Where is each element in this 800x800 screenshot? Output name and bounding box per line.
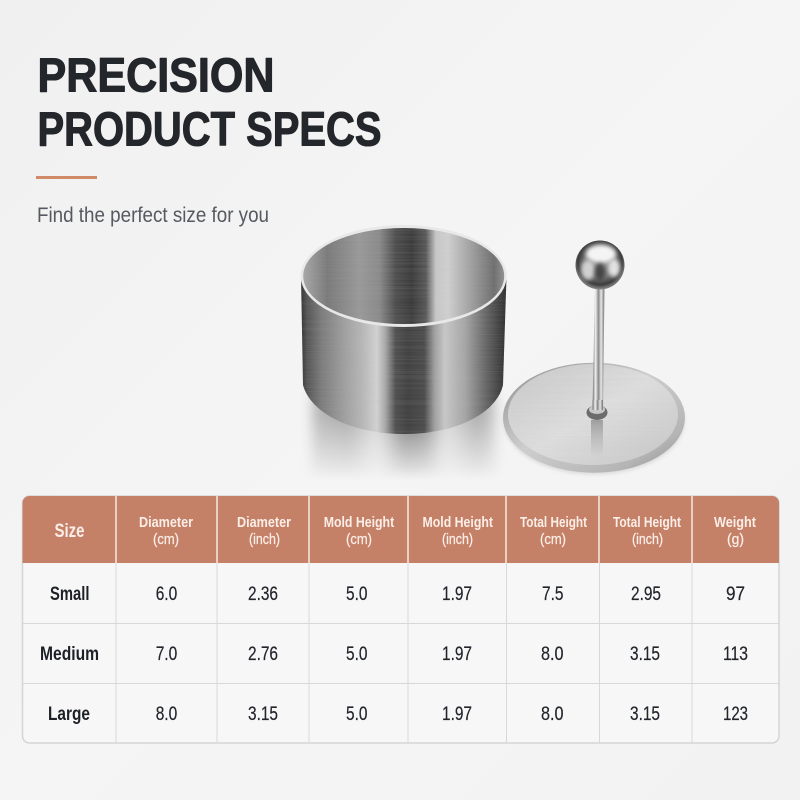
table body [22,496,779,743]
row: medium: 8.0 [541,644,564,665]
header labels: (cm) [153,531,179,548]
row: small: 1.97 [442,584,472,605]
row: large: 8.0 [156,704,177,725]
row: small [50,584,745,605]
ring mold [300,225,508,436]
header labels: Weight [714,514,756,531]
press stem [592,285,604,410]
specs table [22,496,780,743]
row: small: 7.5 [542,584,564,605]
header labels: Diameter [237,514,291,531]
press ball knob [576,240,624,290]
row: medium: 5.0 [346,644,368,665]
row: small: 2.95 [631,584,661,605]
title: PRECISION [38,50,274,102]
disc shadow [504,368,684,474]
press disc [503,362,685,473]
header labels: (g) [727,531,744,548]
header labels: Diameter [139,514,193,531]
header labels: Mold Height [324,514,394,531]
ring reflection on surface [312,395,496,480]
title [38,50,382,156]
row: large: 1.97 [442,704,472,725]
header labels: Size [54,521,84,542]
row: medium: 113 [723,644,748,665]
stem base [586,400,608,420]
row: medium [40,644,748,665]
header labels: Total Height [520,514,587,531]
product image: stainless steel ring mold and press [300,225,685,480]
row: medium: 1.97 [442,644,472,665]
row: large: Large [48,704,90,725]
table header band [22,496,780,563]
header labels: (inch) [632,531,663,548]
row: large: 5.0 [346,704,368,725]
header labels: Mold Height [422,514,493,531]
header labels: (cm) [540,531,566,548]
row: large: 123 [723,704,748,725]
row: small: 97 [726,584,745,605]
row: medium: 3.15 [630,644,660,665]
row: large: 3.15 [248,704,278,725]
row: large: 8.0 [541,704,564,725]
header labels: Total Height [613,514,681,531]
header labels: (inch) [442,531,473,548]
subtitle: Find the perfect size for you [37,204,269,227]
row: medium: Medium [40,644,99,665]
header labels: (inch) [249,531,280,548]
row: medium: 2.76 [248,644,278,665]
title: PRODUCT SPECS [38,104,382,156]
row: medium: 7.0 [156,644,177,665]
header labels [54,514,756,548]
accent rule [36,176,97,179]
row: large: 3.15 [630,704,660,725]
header labels: (cm) [346,531,372,548]
table grid [23,563,779,743]
row: small: Small [50,584,90,605]
row: small: 6.0 [156,584,177,605]
row: small: 2.36 [248,584,278,605]
row: small: 5.0 [346,584,368,605]
row: large [48,704,748,725]
